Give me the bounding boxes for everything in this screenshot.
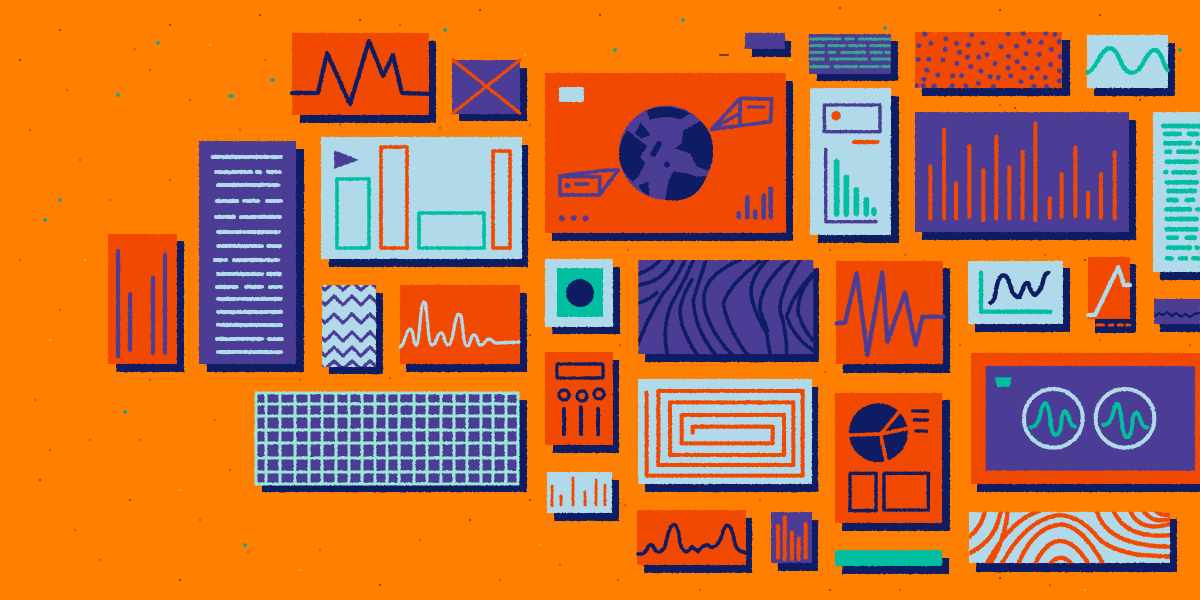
mini bars [739,188,771,217]
zigzag lines [322,284,376,368]
red bars [930,123,1115,220]
panel: red triangle chart [1088,257,1136,333]
green lines [811,39,889,67]
page dots [559,215,589,221]
panel: zigzag pattern [316,282,383,374]
icon: globe [619,106,713,200]
red dash [854,135,877,148]
wave trace [638,525,746,554]
wood grain curves [638,260,813,354]
callout beam left [560,170,618,195]
line chart trace [292,41,430,104]
panel: squiggle chart [968,261,1070,332]
icon: play triangle [334,150,359,169]
panel: crossed box [452,60,527,121]
display [557,364,603,378]
panel: red bars [108,234,184,372]
panel: red line chart [292,33,436,123]
panel: oscilloscope [971,353,1200,492]
text lines [213,157,282,352]
purple bars [118,251,165,356]
contour lines [969,511,1172,564]
spiral line [647,391,803,476]
report header box [824,105,880,132]
teal indicator [995,377,1012,387]
chart axis [826,149,876,222]
panel: tall report [810,88,899,243]
panel: purple tall bar chart [915,112,1136,240]
panel: grid table [255,392,527,492]
panel: bar outlines chart [321,137,528,267]
red bars [778,517,806,559]
zigzag trace [837,273,943,355]
red marker [831,111,841,120]
panel: pie report [835,393,950,531]
grid lines [255,392,519,485]
panel: dotted pattern [915,32,1070,96]
screen [986,366,1195,471]
squiggle trace [991,273,1048,303]
panel: small bar chart [771,512,818,571]
rising trace [1088,267,1130,315]
bar outlines [337,147,510,248]
panel: red wave chart [400,285,527,372]
panel: red zigzag chart [836,261,950,373]
panel: small tick chart [547,472,619,521]
dial left [1024,389,1083,448]
ticks [552,478,605,506]
outlined boxes [850,473,928,511]
panel: spiral [638,379,818,492]
pie chart [847,403,908,463]
legend dashes [913,411,928,431]
teal square [557,268,603,317]
dots [917,33,1060,87]
panel: controls [545,352,619,453]
knobs [559,389,604,401]
panel: teal text document [1153,112,1200,280]
squiggle [1155,312,1200,317]
teal bars [837,162,874,214]
axis [981,273,1051,312]
wave trace [400,302,519,347]
panel: small purple strip [1154,299,1200,332]
callout beam right [712,98,772,129]
sine trace [1087,48,1168,73]
panel: globe dashboard [545,73,793,241]
panel: teal sine wave [1087,35,1175,96]
panel: purple text document [199,141,304,372]
navy dot [566,279,594,307]
dial right [1096,389,1154,448]
teal lines [1163,126,1199,258]
panel: green text strip [809,34,898,81]
cross lines [453,60,520,113]
panel: teal bar [835,550,949,574]
sliders [564,407,598,434]
dashed footer [1097,320,1130,329]
panel: wood grain purple [638,260,819,362]
panel: red wave footer [637,510,752,573]
panel: small purple tab [745,33,791,57]
panel: teal speaker tile [545,259,620,334]
label tag [559,87,584,102]
panel: contour pattern [969,511,1177,572]
